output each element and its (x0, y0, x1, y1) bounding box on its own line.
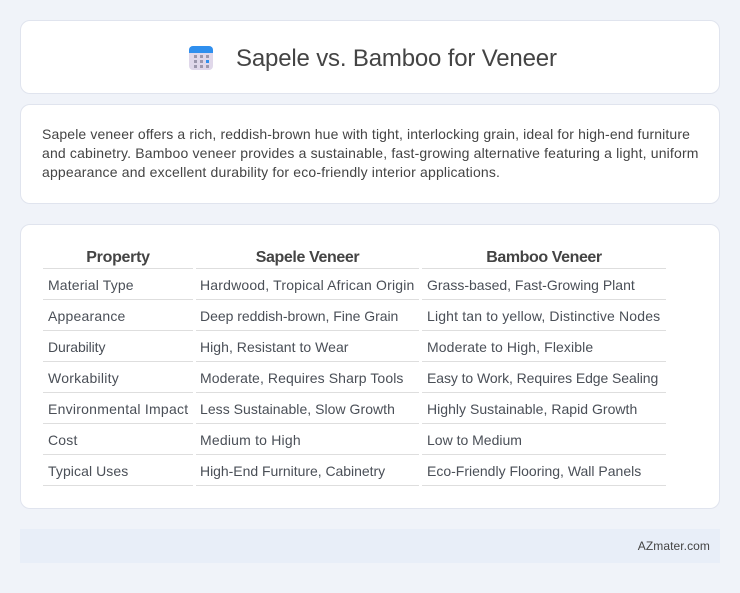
comparison table (43, 249, 666, 486)
row: appearance: Deep reddish-brown, Fine Grain (200, 308, 398, 324)
row: typical uses: High-End Furniture, Cabinetry (200, 463, 385, 479)
intro text card (20, 104, 720, 204)
row: environmental impact: Environmental Impact (48, 401, 188, 417)
header card (20, 20, 720, 94)
row: workability: Moderate, Requires Sharp Tools (200, 370, 404, 386)
row: environmental impact (48, 401, 637, 417)
row: cost: Low to Medium (427, 432, 522, 448)
row: environmental impact: Less Sustainable, Slow Growth (200, 401, 395, 417)
row: cost: Cost (48, 432, 78, 448)
intro paragraph (42, 126, 699, 180)
row: appearance: Light tan to yellow, Distinctive Nodes (427, 308, 660, 324)
row: typical uses: Typical Uses (48, 463, 128, 479)
intro paragraph: and cabinetry. Bamboo veneer provides a sustainable, fast-growing alternative featuring a light, uniform (42, 145, 699, 161)
row: durability (48, 339, 593, 355)
row: environmental impact: Highly Sustainable, Rapid Growth (427, 401, 637, 417)
row: workability: Workability (48, 370, 119, 386)
row: cost: Medium to High (200, 432, 301, 448)
intro paragraph: appearance and excellent durability for eco-friendly interior applications. (42, 164, 500, 180)
row: durability: Moderate to High, Flexible (427, 339, 593, 355)
title: Sapele vs. Bamboo for Veneer (236, 45, 557, 72)
table header (86, 249, 602, 266)
row: material type (48, 277, 635, 293)
table header: Sapele Veneer (256, 249, 359, 266)
comparison table card (20, 224, 720, 509)
row: material type: Grass-based, Fast-Growing Plant (427, 277, 635, 293)
icon: calendar (189, 46, 213, 70)
table header: Property (86, 249, 150, 266)
row: appearance (48, 308, 660, 324)
row: typical uses: Eco-Friendly Flooring, Wall Panels (427, 463, 641, 479)
row: appearance: Appearance (48, 308, 126, 324)
intro paragraph: Sapele veneer offers a rich, reddish-brown hue with tight, interlocking grain, ideal for high-end furniture (42, 126, 690, 142)
row: cost (48, 432, 522, 448)
row: workability: Easy to Work, Requires Edge Sealing (427, 370, 658, 386)
row: workability (48, 370, 658, 386)
row: material type: Hardwood, Tropical African Origin (200, 277, 414, 293)
row: material type: Material Type (48, 277, 134, 293)
table header: Bamboo Veneer (486, 249, 602, 266)
row: durability: Durability (48, 339, 105, 355)
footer source text: AZmater.com (638, 539, 710, 553)
row: typical uses (48, 463, 641, 479)
row: durability: High, Resistant to Wear (200, 339, 349, 355)
footer bar (20, 529, 720, 563)
